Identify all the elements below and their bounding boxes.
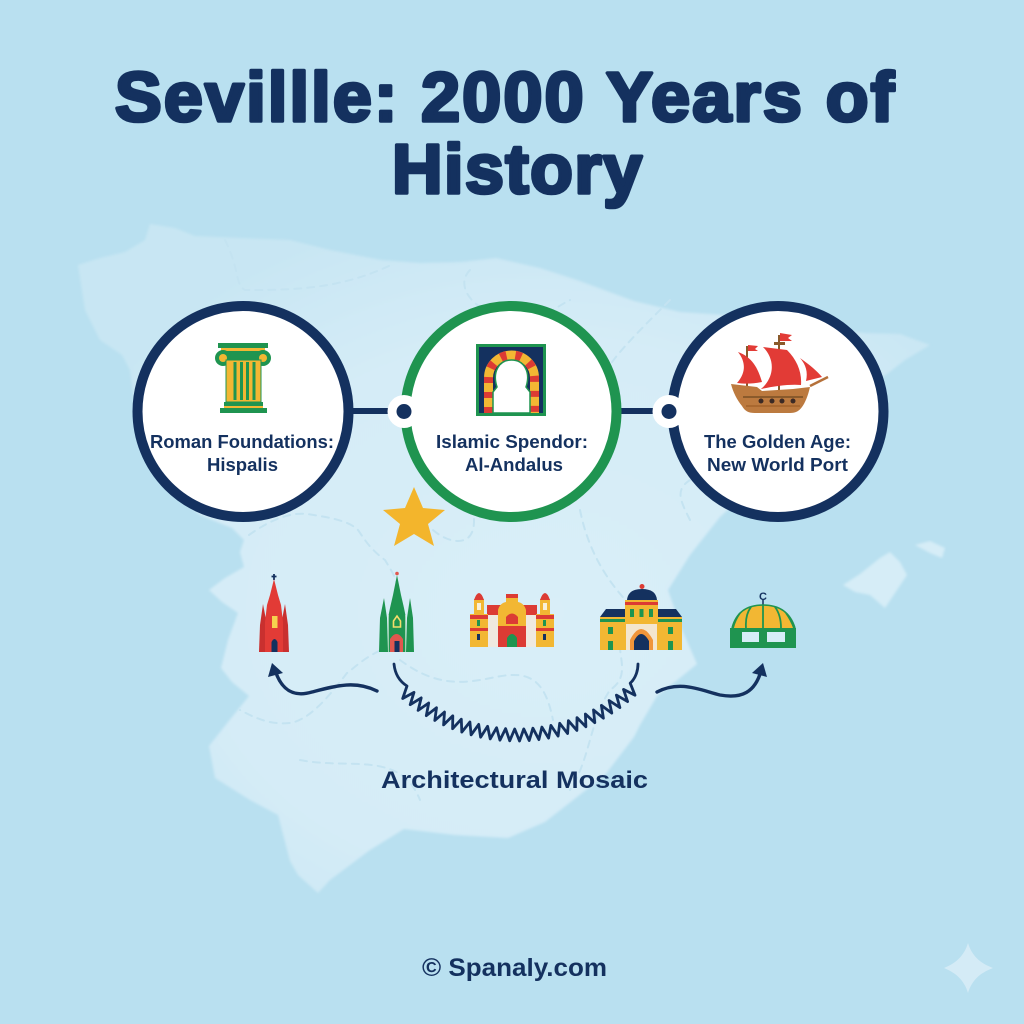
label: The Golden Age: New World Port: [707, 454, 848, 475]
icon: green dome: C: [759, 591, 767, 603]
connector node: second: [652, 395, 686, 428]
connector: Islamic to Golden Age: [619, 408, 657, 414]
map: Mallorca: [843, 552, 907, 608]
icon: sparkle: [944, 943, 993, 993]
icon: galleon ship: [731, 333, 828, 413]
icon: Roman column: [215, 343, 271, 413]
map: Menorca: [915, 541, 945, 558]
connector node: first: [388, 395, 420, 428]
label: Islamic Spendor: Islamic Spendor:: [436, 431, 588, 452]
panel: Islamic Splendor: [406, 306, 616, 517]
label: Roman Foundations: Hispalis: [207, 454, 278, 475]
arrow: to red church: [268, 663, 377, 694]
icon: red gothic church: [259, 574, 289, 652]
label: The Golden Age: The Golden Age:: [704, 431, 851, 452]
panel: The Golden Age: [672, 306, 884, 517]
map of Spain: [78, 224, 945, 893]
map: dashed regional borders: [225, 240, 690, 800]
icon: horseshoe arch: [478, 346, 544, 414]
title: Sevillle: 2000 Years of: [115, 58, 895, 136]
label: Roman Foundations: [150, 431, 334, 475]
panel: Roman Foundations: [138, 306, 348, 517]
connector: Roman to Islamic: [352, 408, 390, 414]
label: The Golden Age: [704, 431, 851, 475]
label: Architectural Mosaic: Architectural Mosaic: [381, 767, 648, 794]
icon: gold star: [383, 487, 445, 546]
title: [115, 58, 895, 208]
arrow: zigzag link between churches: [394, 664, 638, 741]
icon: domed building: [600, 584, 682, 650]
footer credit: © Spanaly.com: [422, 954, 607, 982]
label: Islamic Spendor: Al-Andalus: [465, 454, 563, 475]
icon: yellow and red palace: [470, 593, 554, 647]
label: Roman Foundations: Roman Foundations:: [150, 431, 334, 452]
label: Islamic Spendor: [436, 431, 588, 475]
icon: green dome: [730, 591, 796, 648]
arrow: to green dome: [657, 663, 767, 696]
icon: green gothic church: [379, 572, 414, 652]
title: History: [392, 130, 642, 208]
